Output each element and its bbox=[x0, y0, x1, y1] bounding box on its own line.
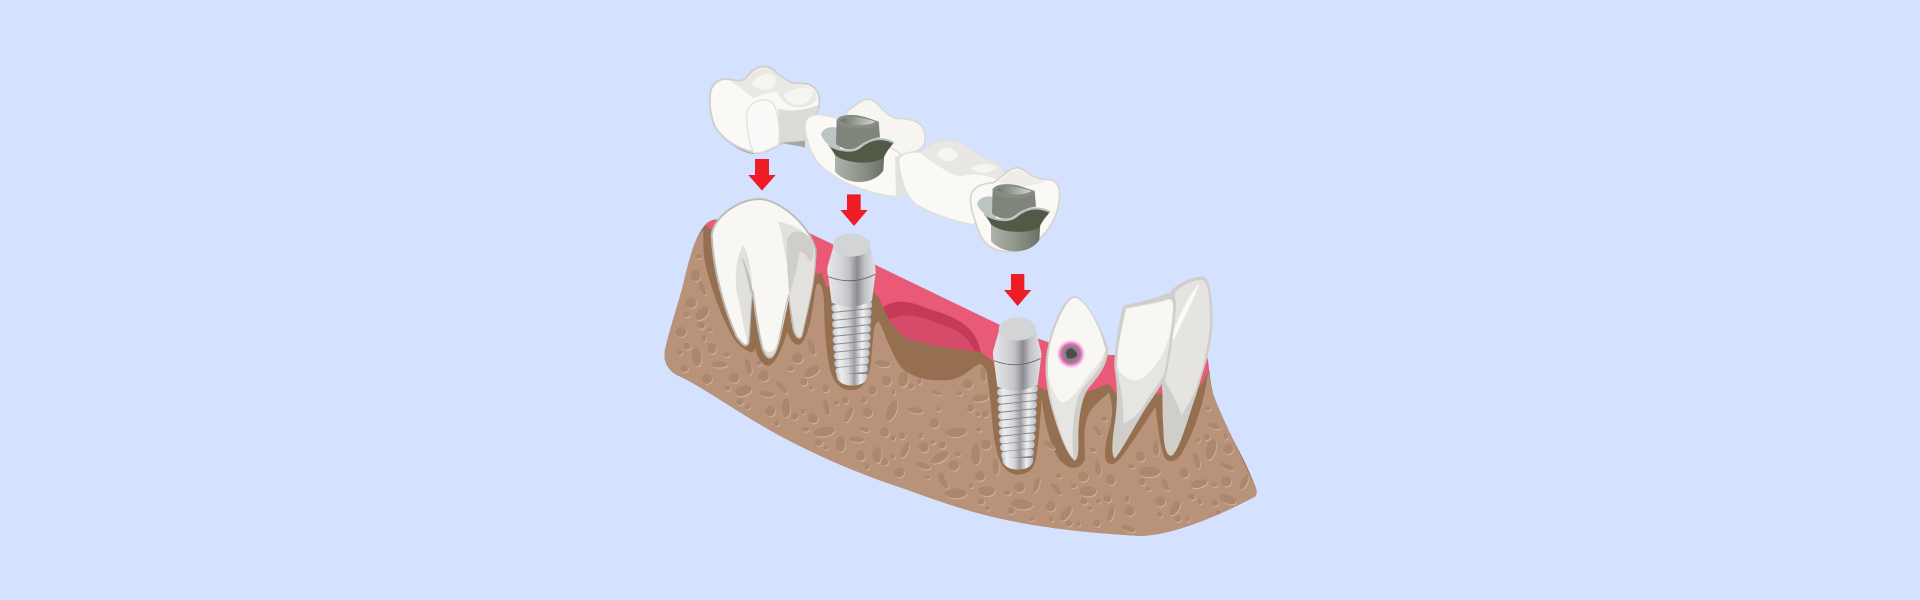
cavity bbox=[1056, 339, 1086, 369]
molar tooth bbox=[712, 199, 816, 358]
rear incisor tooth bbox=[1162, 277, 1213, 456]
crown: left molar bbox=[710, 66, 819, 154]
arrow: down to left implant bbox=[840, 194, 868, 226]
jaw with gum, bone, teeth and implants bbox=[664, 199, 1257, 536]
implant right bbox=[993, 317, 1041, 470]
jaw bone bbox=[664, 225, 1257, 536]
premolar tooth with cavity bbox=[1046, 296, 1108, 461]
bone pits bbox=[676, 255, 1251, 535]
illustration: dental implant bridge bbox=[664, 65, 1257, 536]
crown: second with abutment bbox=[805, 99, 925, 197]
crown: fourth with abutment bbox=[971, 168, 1060, 252]
bridge crowns bbox=[710, 66, 1060, 252]
arrow: down to molar bbox=[748, 159, 776, 191]
gum tissue bbox=[705, 219, 1209, 433]
front incisor tooth bbox=[1112, 293, 1176, 458]
implant left bbox=[827, 233, 876, 386]
arrow: down to right implant bbox=[1004, 274, 1031, 306]
crown: third pontic bbox=[898, 140, 1005, 225]
